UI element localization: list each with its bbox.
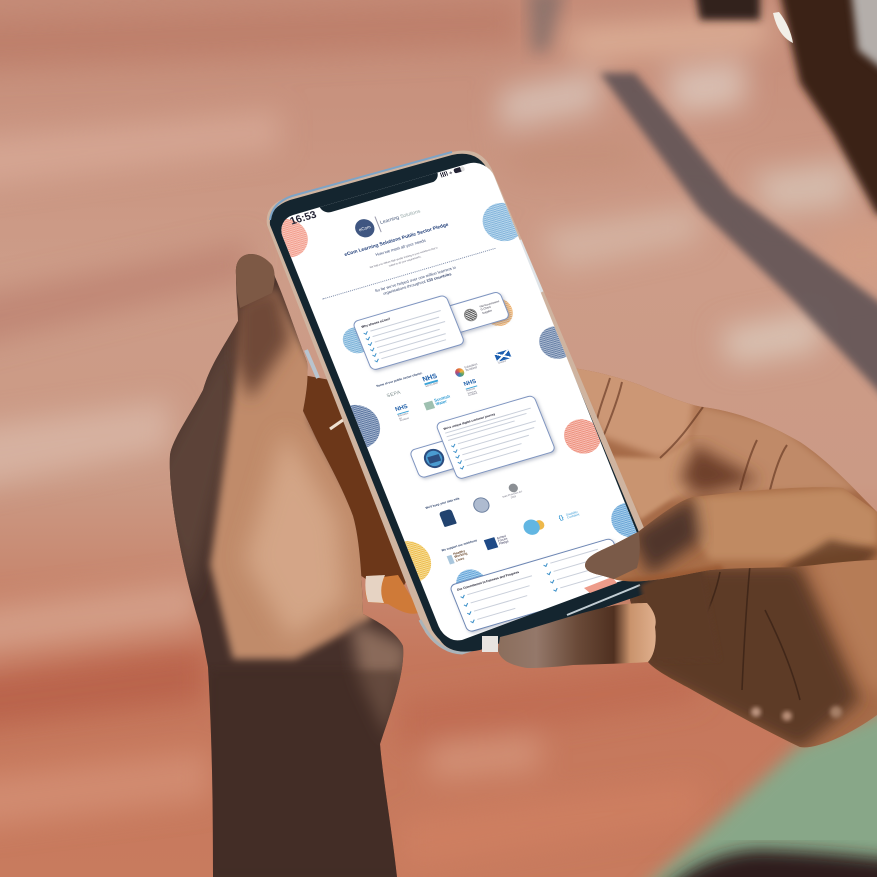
- subtitle: How we meet all your needs: [375, 238, 426, 257]
- card: commitment to fairness and progress: [449, 537, 631, 633]
- logo: Scotland flag: [494, 350, 512, 365]
- card: why choose eCom: [352, 294, 466, 371]
- logo: disability confident: Confident: [567, 513, 580, 520]
- thumb nail: [585, 532, 640, 579]
- logo: disability confident: {}: [558, 515, 565, 522]
- logo: NHS board right: Scotland: [468, 392, 478, 397]
- logo: Scotland flag: Scotland: [498, 361, 507, 365]
- logo: NHS board left: [394, 404, 409, 422]
- logo: disability confident: Disability: [565, 510, 578, 517]
- hatched circle: grey blue right: [534, 322, 579, 363]
- logo: Healthy Working Lives: Working: [454, 552, 468, 559]
- logo: data protection crest: [502, 484, 523, 499]
- left hand: thumb nail: [236, 254, 275, 308]
- logo: Education Scotland: Scotland: [465, 365, 478, 372]
- hatched circle: yellow left: [380, 536, 438, 589]
- logo: NHS Scotland: SCOTLAND: [425, 382, 438, 388]
- logo: eCom Learning Solutions: Learning Solutions: [379, 209, 421, 226]
- logo: Scottish Water: [424, 394, 451, 410]
- logo: data protection crest: Data Protection Act: [502, 490, 523, 499]
- logo: NHS board left: Scotland: [399, 417, 409, 422]
- hatched circle: blue lower right: [606, 498, 653, 541]
- left hand: [170, 254, 418, 877]
- logo: Scottish Water: Water: [435, 399, 448, 406]
- text: keep data safe: We'll keep your data safe: [425, 496, 460, 510]
- intro small print: We help you deliver high quality training to your workforce that is: [369, 246, 438, 269]
- card: commitment to fairness and progress: Our Commitment to Fairness and Progress: [456, 570, 520, 592]
- hatched circle: peach right: [559, 415, 606, 458]
- right hand: palm shade: [620, 565, 860, 750]
- logo: Armed Forces: Pledge: [498, 540, 509, 546]
- right hand behind phone: [576, 368, 877, 748]
- dotted divider: [322, 248, 496, 300]
- phone: side buttons: [306, 350, 318, 378]
- logo: Scottish Water: Scottish: [433, 394, 451, 403]
- logo: Armed Forces: Armed: [496, 534, 507, 540]
- status icons: ⌖: [448, 170, 454, 177]
- text: support workforce: We support our workforce: [441, 538, 478, 552]
- status icons: [440, 166, 465, 178]
- card: government crest: G-Cloud: [480, 305, 491, 312]
- logo: Armed Forces: Forces: [497, 537, 508, 543]
- thumb: [585, 487, 877, 582]
- right hand: second finger: [614, 442, 691, 520]
- logo: NHS board right: [463, 379, 478, 397]
- phone screen with the pledge infographic: [276, 158, 658, 646]
- card: why choose eCom: Why choose eCom?: [361, 317, 391, 329]
- left hand: fingertip and nail: [365, 575, 420, 614]
- hatched circle: grey blue left: [326, 399, 387, 454]
- logo: Education Scotland: [455, 362, 478, 377]
- reach statement: So far we've helped over one million learners in: [374, 265, 457, 293]
- notch: [319, 171, 440, 215]
- left hand: palm and thumb: [170, 254, 404, 877]
- badge: cyber essentials: [471, 495, 492, 515]
- logo: mental health circles: [524, 520, 544, 535]
- hatched circle: orange: [479, 295, 517, 329]
- hatched circle: blue left: [339, 324, 374, 356]
- logo: Armed Forces: [484, 534, 509, 550]
- logo: Healthy Working Lives: Healthy: [453, 549, 466, 556]
- right hand fingers over phone: [498, 487, 877, 668]
- background: diagonal shadow: [600, 73, 877, 425]
- logo: eCom Learning Solutions: eCom: [358, 224, 371, 232]
- right hand: index finger: [576, 368, 697, 458]
- logo: eCom Learning Solutions: [355, 209, 421, 238]
- background: green garment bottom right: [630, 700, 877, 877]
- logo: NHS Scotland: [422, 373, 438, 388]
- hatched circle: blue top right: [477, 198, 529, 246]
- logo: disability confident: [558, 510, 580, 522]
- card: government crest: HM Government: [479, 299, 500, 309]
- logo: NHS board left: NHS: [395, 404, 409, 413]
- card: government crest: Supplier: [481, 308, 492, 315]
- intro small print: suited to all your requirements.: [388, 255, 422, 267]
- hatched circle: blue above card: [452, 566, 491, 602]
- logo: NHS board left: Education: [398, 412, 409, 418]
- title: eCom Learning Solutions Public Sector Pledge: [344, 223, 450, 258]
- bottom finger: [498, 603, 656, 668]
- palm patch over phone edge: [640, 555, 720, 662]
- logo: data protection crest: 2018: [510, 495, 516, 499]
- card: government crest: [444, 291, 511, 335]
- card: unique digital customer journey: [435, 394, 556, 480]
- logo: Healthy Working Lives: Lives: [455, 556, 465, 562]
- text: some of our clients: Some of our public sector clients:: [376, 371, 423, 388]
- logo: SEPA: SEPA: [386, 390, 402, 399]
- card: unique digital customer journey: We're unique digital customer journey: [443, 412, 496, 431]
- logo: NHS board left: for: [398, 417, 402, 420]
- logo: NHS board right: NHS: [463, 379, 477, 388]
- right hand: knuckle shadow: [680, 445, 760, 495]
- badge: ISO shield: [439, 509, 457, 527]
- left hand: fingers behind phone: [303, 375, 408, 600]
- status bar: time: 16:53: [288, 209, 318, 227]
- card: badge: [409, 436, 471, 479]
- logo: Education Scotland: Education: [464, 362, 478, 369]
- logo: NHS board right: National: [466, 387, 475, 392]
- background: blurred arm top right: [777, 0, 877, 215]
- logo: NHS board right: Services: [467, 390, 477, 395]
- logo: NHS Scotland: NHS: [422, 373, 438, 383]
- reach statement: organisations throughout 150 countries: [382, 272, 452, 296]
- hatched circle: peach top left: [261, 214, 314, 262]
- logo: Healthy Working Lives: [446, 549, 468, 564]
